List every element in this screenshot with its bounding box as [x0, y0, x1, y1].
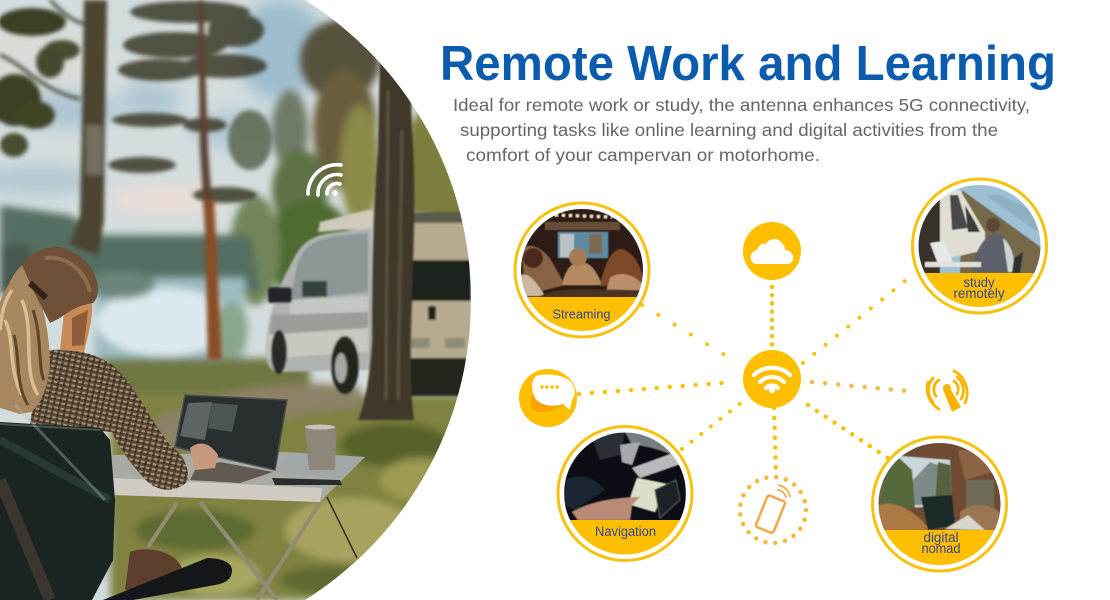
text block: description: supporting tasks like online learning and digital activities from the [460, 120, 998, 140]
laptop [175, 395, 287, 483]
folding table [112, 452, 365, 600]
photo background: sky and forest [0, 0, 480, 600]
icon: antenna with signal waves [927, 371, 967, 412]
label: study remotely: study [964, 275, 995, 290]
panel: study remotely [912, 179, 1046, 313]
panel: Streaming [515, 203, 649, 337]
woman [0, 247, 218, 590]
right-hand forest foliage [230, 20, 480, 305]
label: digital nomad [922, 530, 960, 556]
campervan [266, 210, 471, 396]
icon: central wifi hub [743, 350, 801, 408]
far shore and lake [0, 205, 310, 403]
label: study remotely [954, 275, 1005, 301]
label: Navigation: Navigation [595, 524, 656, 539]
pine tree [108, 0, 272, 360]
label: Streaming: Streaming [552, 306, 610, 322]
panel: digital nomad [872, 437, 1006, 571]
text block: description: comfort of your campervan or motorhome. [466, 145, 820, 165]
icon: chat bubble [519, 369, 577, 427]
icon: smartphone in dotted circle [740, 477, 806, 543]
title: Remote Work and Learning [440, 36, 1056, 91]
label: digital nomad: digital [924, 530, 958, 545]
panel: Navigation [558, 426, 692, 560]
text block: description [453, 95, 1030, 165]
photo: woman working at laptop beside campervan in forest [0, 0, 480, 600]
label: study remotely: remotely [954, 286, 1005, 301]
text block: description: Ideal for remote work or study, the antenna enhances 5G connectivity, [453, 95, 1030, 115]
icon: wifi signal over campervan [308, 165, 341, 196]
ground [110, 384, 480, 600]
left tree trunk and branches [0, 0, 107, 255]
icon: cloud [743, 222, 801, 280]
camping chair [0, 405, 232, 600]
label: digital nomad: nomad [922, 541, 960, 556]
dotted connectors from the hub [579, 281, 917, 477]
foreground tree trunk [358, 50, 414, 420]
cup and phone on the table [272, 424, 342, 485]
